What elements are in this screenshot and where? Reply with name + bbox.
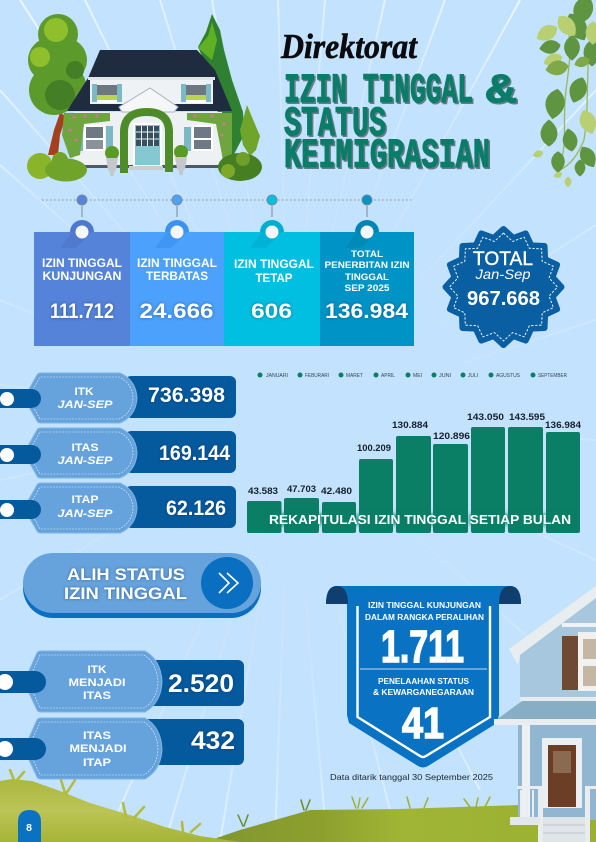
panel: izin tinggal tetap: TETAP [256, 273, 293, 285]
script title: Direktorat: Direktorat [280, 27, 418, 66]
bar chart: monthly recap [247, 412, 582, 533]
bar values: 120.896 [433, 431, 470, 442]
bar values: 143.050 [467, 412, 504, 423]
tag row: ITAS menjadi ITAP: ITAS [83, 730, 111, 742]
panel: total penerbitan izin tinggal: SEP 2025 [344, 283, 390, 293]
tag row: ITAS menjadi ITAP [0, 718, 244, 779]
bar values: 136.984 [545, 420, 582, 431]
badge: total jan-sep: Jan-Sep [474, 266, 531, 282]
house base [80, 165, 223, 168]
right conifer [198, 14, 260, 158]
chart legend: JANUARI [266, 373, 288, 379]
icon: double chevron [201, 557, 253, 609]
door [542, 738, 582, 808]
ribbon banner [326, 586, 521, 768]
button: alih status izin tinggal [23, 553, 261, 618]
bar values: 100.209 [357, 443, 391, 454]
ribbon banner: DALAM RANGKA PERALIHAN [365, 613, 484, 622]
main title: IZIN TINGGAL [286, 68, 474, 116]
chart legend: MARET [346, 373, 363, 379]
tag row: ITK menjadi ITAS: MENJADI [68, 677, 126, 689]
main title [284, 67, 518, 182]
left tree [28, 14, 87, 155]
panel: izin tinggal terbatas: TERBATAS [146, 271, 208, 283]
tag row: ITK menjadi ITAS: ITAS [83, 690, 111, 702]
main title: KEIMIGRASIAN [284, 132, 490, 180]
heading [280, 27, 518, 182]
bar values: 130.884 [392, 420, 429, 431]
timeline with nodes [42, 195, 414, 217]
bar values [248, 412, 582, 497]
badge: total jan-sep: TOTAL [473, 248, 533, 270]
right hill [205, 805, 596, 842]
data note: Data ditarik tanggal 30 September 2025 [330, 772, 493, 782]
panel: total penerbitan izin tinggal: TINGGAL [345, 272, 390, 282]
upper window and shutter [562, 632, 596, 691]
panel: total penerbitan izin tinggal: TOTAL [351, 249, 384, 259]
door with arch [124, 112, 169, 173]
tag row: ITK jan-sep: ITK [74, 386, 94, 398]
tag row: ITAP jan-sep: 62.126 [166, 497, 226, 520]
tag row: ITAS menjadi ITAP: ITAP [83, 757, 111, 769]
tag row: ITAS jan-sep: 169.144 [159, 442, 230, 465]
tag row: ITAS jan-sep: ITAS [72, 442, 98, 454]
tag row: ITK menjadi ITAS: 2.520 [168, 670, 234, 698]
chart legend: APRIL [381, 373, 395, 379]
tag row: ITK menjadi ITAS [0, 651, 244, 712]
main title: & [488, 68, 518, 116]
panel: izin tinggal tetap: 606 [251, 300, 292, 323]
panel: total penerbitan izin tinggal: 136.984 [325, 300, 408, 323]
porch railing [517, 786, 596, 842]
ribbon banner: 41 [402, 699, 444, 748]
panel: izin tinggal kunjungan [34, 220, 130, 346]
climbing roses [62, 113, 232, 160]
tag row: ITK jan-sep: 736.398 [148, 384, 225, 407]
lower windows [77, 125, 213, 151]
gable trim [509, 586, 596, 665]
chart title: REKAPITULASI IZIN TINGGAL SETIAP BULAN [269, 512, 571, 527]
chart legend: JULI [468, 373, 478, 379]
main title: STATUS [286, 102, 388, 150]
tag row: ITK jan-sep: JAN-SEP [58, 399, 113, 411]
grass tufts [10, 770, 490, 832]
chart legend: AGUSTUS [496, 373, 521, 379]
tag row: ITAS jan-sep: JAN-SEP [58, 455, 113, 467]
upper wall [520, 596, 596, 700]
badge: total jan-sep: 967.668 [467, 288, 540, 310]
chart legend: JUNI [439, 373, 451, 379]
porch steps [510, 817, 585, 842]
panel: izin tinggal tetap: IZIN TINGGAL [234, 259, 314, 271]
panel: total penerbitan izin tinggal: PENERBITAN IZIN [324, 260, 410, 270]
porch column [522, 725, 530, 817]
panel: total penerbitan izin tinggal [320, 220, 414, 346]
panel: izin tinggal terbatas: IZIN TINGGAL [137, 258, 217, 270]
panel: izin tinggal terbatas [130, 220, 224, 346]
vine plant [532, 0, 596, 187]
main title: & [486, 67, 517, 115]
tag row: ITAP jan-sep: ITAP [72, 494, 98, 506]
bar values: 143.595 [509, 412, 546, 423]
lower wall [518, 725, 596, 820]
panel: izin tinggal kunjungan: 111.712 [50, 300, 114, 323]
chart legend: SEPTEMBER [538, 373, 567, 379]
button: alih status izin tinggal: IZIN TINGGAL [64, 584, 187, 603]
tag row: ITAP jan-sep: JAN-SEP [58, 508, 113, 520]
ribbon banner: 1.711 [381, 621, 464, 672]
roof [67, 50, 232, 111]
panel: izin tinggal terbatas: 24.666 [140, 300, 214, 323]
panel: izin tinggal kunjungan: IZIN TINGGAL [42, 258, 122, 270]
illustration: house with trees [27, 14, 262, 182]
tag row: ITAS menjadi ITAP: 432 [191, 727, 235, 755]
porch roof [494, 697, 596, 725]
bushes [27, 152, 262, 182]
chart legend [258, 372, 567, 379]
chart legend: FEBURARI [305, 373, 329, 379]
lower wall [74, 112, 222, 165]
ribbon banner: IZIN TINGGAL KUNJUNGAN [368, 601, 481, 610]
urns with topiary [105, 145, 188, 176]
tag row: ITK jan-sep [0, 373, 236, 423]
ribbon banner: PENELAAHAN STATUS [378, 677, 470, 686]
tag row: ITK menjadi ITAS: ITK [88, 664, 107, 676]
ribbon banner: & KEWARGANEGARAAN [373, 688, 474, 697]
main title: STATUS [284, 100, 386, 148]
blue house illustration [494, 586, 596, 842]
main title: IZIN TINGGAL [284, 67, 473, 115]
button: alih status izin tinggal: ALIH STATUS [67, 565, 185, 584]
bar values: 43.583 [248, 486, 278, 497]
tag row: ITAP jan-sep [0, 483, 236, 533]
bar values: 47.703 [287, 484, 316, 495]
page number tab [18, 810, 41, 842]
main title: KEIMIGRASIAN [286, 134, 492, 182]
gable [119, 88, 178, 112]
bars [247, 427, 580, 533]
panel: izin tinggal tetap [224, 220, 320, 346]
badge: total jan-sep [446, 229, 562, 345]
tag row: ITAS jan-sep [0, 428, 236, 478]
tag row: ITAS menjadi ITAP: MENJADI [70, 743, 126, 755]
panel: izin tinggal kunjungan: KUNJUNGAN [42, 271, 122, 283]
chart legend: MEI [413, 373, 422, 379]
left hill [0, 779, 240, 842]
upper wall and windows [88, 77, 215, 104]
page number tab: 8 [26, 822, 32, 834]
bar values: 42.480 [321, 486, 352, 497]
